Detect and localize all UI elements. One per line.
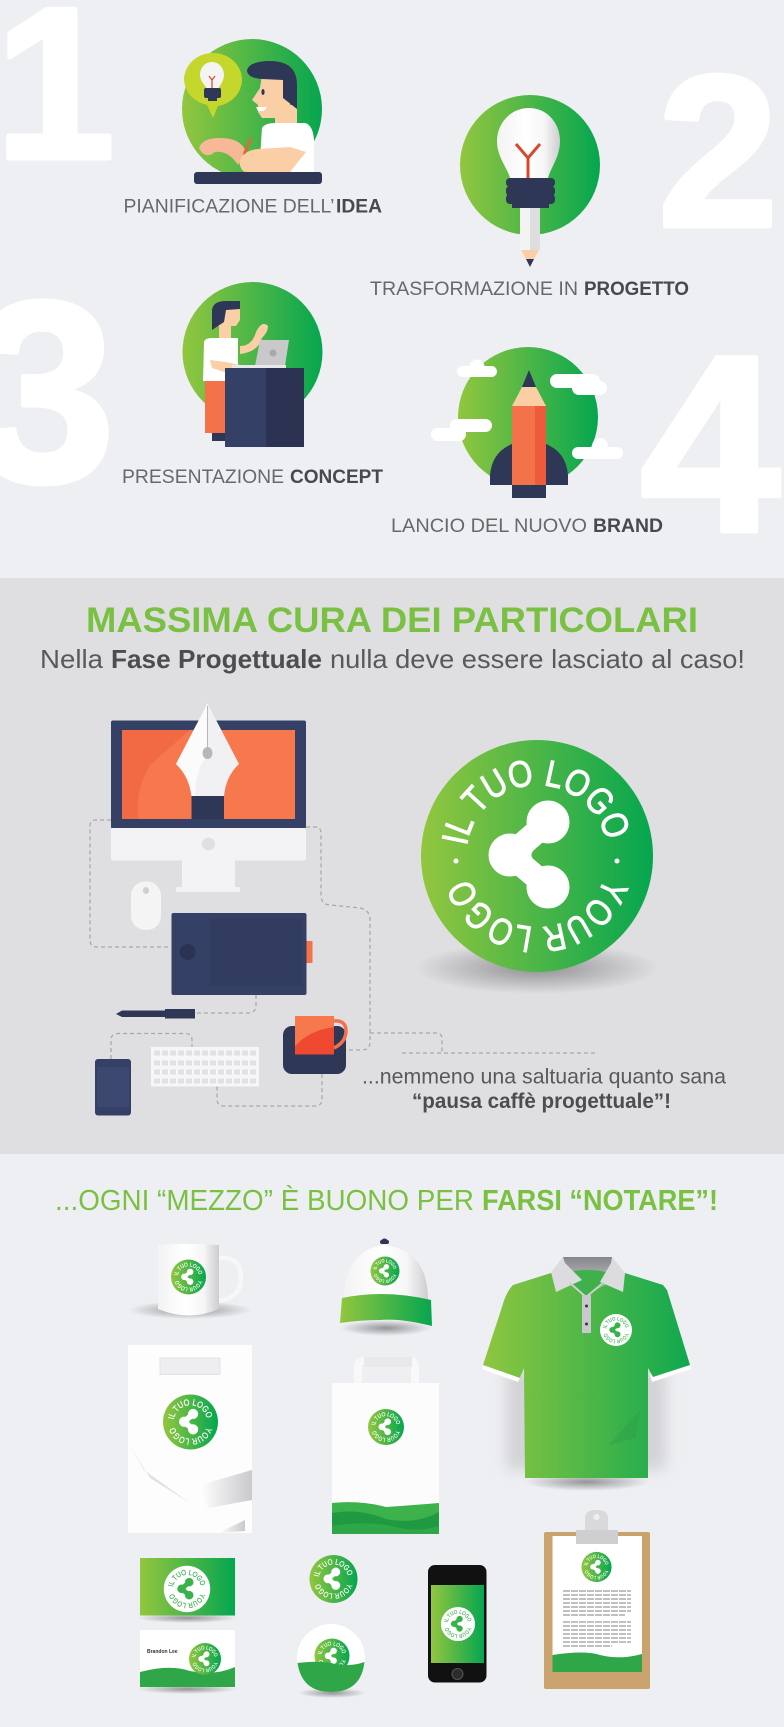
mockup: smartphone	[428, 1565, 486, 1682]
heading: ogni mezzo: ...OGNI “MEZZO” È BUONO PER	[55, 1184, 474, 1217]
mockup: mug: IL TUO LOGO	[174, 1262, 202, 1276]
main logo badge: YOUR LOGO	[449, 882, 629, 953]
mockup: mug	[134, 1244, 246, 1318]
mockup: smartphone: YOUR LOGO	[445, 1628, 472, 1638]
mockup: logo badge: IL TUO LOGO	[314, 1559, 352, 1576]
mockup: shopping bag	[332, 1357, 439, 1534]
main logo badge	[421, 740, 653, 992]
mockup: green business card	[140, 1558, 235, 1622]
label: step 3	[122, 467, 383, 488]
mockup: logo badge: YOUR LOGO	[315, 1584, 352, 1599]
label: step 1: IDEA	[336, 196, 382, 218]
step 3: presentation illustration	[182, 282, 322, 447]
label: step 4	[391, 516, 663, 537]
iMac with pen nib	[111, 704, 306, 892]
label: step 1: PIANIFICAZIONE DELL’	[124, 196, 334, 218]
large step numbers	[0, 0, 780, 585]
mockup: round button: YOUR LOGO	[318, 1660, 346, 1665]
mockup: green business card: IL TUO LOGO	[168, 1570, 206, 1586]
subheading	[40, 644, 745, 674]
graphics tablet	[172, 913, 312, 995]
mockup: mug: YOUR LOGO	[175, 1281, 202, 1292]
mouse	[131, 882, 161, 930]
mockup: logo badge	[310, 1555, 358, 1603]
mockup: clipboard: YOUR LOGO	[585, 1570, 608, 1580]
caption: coffee break: “pausa caffè progettuale”!	[412, 1090, 671, 1113]
mockup: cap: IL TUO LOGO	[373, 1259, 396, 1270]
mockup: envelope: YOUR LOGO	[170, 1428, 212, 1445]
subheading: Fase Progettuale	[111, 644, 322, 674]
mockup: polo shirt: IL TUO LOGO	[602, 1316, 629, 1328]
mockup: smartphone: IL TUO LOGO	[444, 1610, 472, 1622]
mockup: shopping bag: IL TUO LOGO	[371, 1412, 400, 1426]
subheading: nulla deve essere lasciato al caso!	[330, 644, 745, 674]
heading: ogni mezzo	[55, 1184, 718, 1217]
mockup: white business card: YOUR LOGO	[192, 1662, 218, 1672]
mockup: envelope: IL TUO LOGO	[168, 1399, 212, 1420]
subheading: Nella	[40, 644, 104, 674]
mockup: shopping bag: YOUR LOGO	[372, 1431, 400, 1442]
label: step 4: LANCIO DEL NUOVO	[391, 516, 587, 537]
mockup: white business card	[140, 1630, 235, 1694]
mockup: white business card: Brandon Lee	[147, 1649, 178, 1655]
step 1: planning illustration	[182, 39, 322, 184]
mockup: cap	[340, 1238, 432, 1336]
mockup: round button	[297, 1624, 365, 1698]
label: step 2: PROGETTO	[584, 279, 689, 300]
label: step 4: BRAND	[593, 516, 663, 537]
mockup: polo shirt: YOUR LOGO	[604, 1334, 629, 1344]
step 2: bulb pencil illustration	[460, 95, 600, 267]
label: step 2: TRASFORMAZIONE IN	[370, 279, 578, 300]
heading: massima cura: MASSIMA CURA DEI PARTICOLARI	[86, 601, 698, 640]
large step numbers: 2	[658, 30, 778, 272]
caption: coffee break: ...nemmeno una saltuaria quanto sana	[362, 1066, 726, 1088]
mockup: cap: YOUR LOGO	[374, 1274, 396, 1283]
label: step 3: CONCEPT	[290, 467, 383, 488]
mockup: clipboard: IL TUO LOGO	[584, 1554, 608, 1566]
mockup: green business card: YOUR LOGO	[169, 1594, 206, 1608]
phone	[95, 1059, 131, 1116]
step 4: pencil rocket illustration	[431, 347, 623, 498]
figure at desk	[194, 61, 322, 184]
heading: ogni mezzo: FARSI “NOTARE”!	[482, 1185, 718, 1217]
mockup: envelope	[128, 1345, 252, 1533]
mockup: white business card: IL TUO LOGO	[192, 1646, 218, 1658]
clouds	[431, 360, 623, 459]
keyboard	[151, 1047, 259, 1086]
caption: coffee break	[362, 1066, 726, 1113]
mockup: polo shirt	[482, 1257, 691, 1490]
label: step 3: PRESENTAZIONE	[122, 467, 284, 488]
mockup: clipboard	[544, 1510, 650, 1689]
label: step 2	[370, 279, 689, 300]
mockup: round button: IL TUO LOGO	[318, 1642, 346, 1654]
icon: speech bubble with bulb	[184, 53, 242, 118]
large step numbers: 4	[640, 304, 780, 585]
dashed connectors	[90, 820, 598, 1106]
main logo badge: IL TUO LOGO	[442, 760, 628, 844]
stylus	[116, 1009, 195, 1018]
coffee mug on coaster	[283, 1016, 346, 1074]
